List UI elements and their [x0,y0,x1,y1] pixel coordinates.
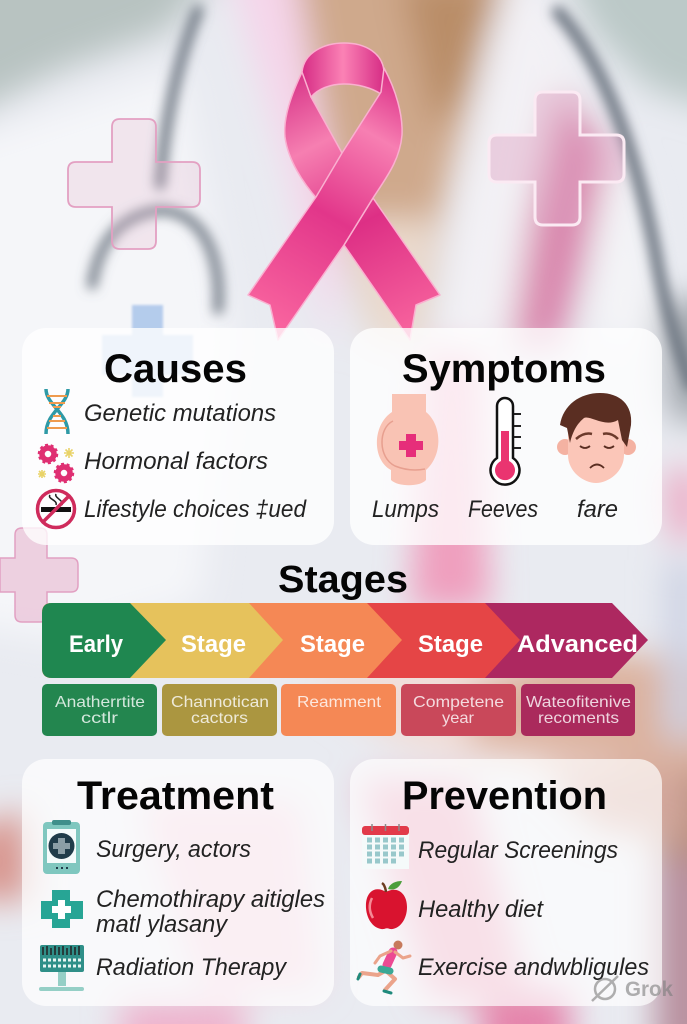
watermark: Grok: Grok [625,978,673,1001]
box: early: Anatherrtite [55,694,145,711]
heading: symptoms: Symptoms [402,347,606,391]
list text: treatment: Surgery, actors [96,836,251,863]
heading: treatment: Treatment [77,774,274,818]
panel: causes [22,328,334,545]
list text: prevention [418,837,649,981]
list text: treatment: matl ylasany [96,911,229,938]
labels: symptoms: fare [577,496,618,523]
box: early: cctlr [81,710,119,727]
box: advanced [521,684,635,736]
icon: thermometer [490,398,521,485]
list text: prevention: Regular Screenings [418,837,618,864]
box: stage two: Channotican [171,694,269,711]
box: stage two [162,684,277,736]
list text: causes: Hormonal factors [84,448,268,475]
icon: lump [377,394,438,485]
labels: symptoms: Lumps [372,496,439,523]
box: advanced: Wateofitenive [526,694,631,711]
decorative cross: blue [102,305,193,397]
stage labels: Stage [181,631,246,658]
list text: causes [84,400,307,523]
icon: runner [358,940,410,993]
panel: treatment [22,759,334,1006]
box: stage three: Reamment [297,694,382,711]
list text: causes: Genetic mutations [84,400,276,427]
list text: prevention: Healthy diet [418,896,544,923]
box: early [42,684,157,736]
icon: radiation machine [39,945,84,991]
box: stage four: year [442,710,475,727]
decorative cross: left [68,119,200,249]
icon: chemo cross [41,890,83,928]
list text: treatment: Radiation Therapy [96,954,288,981]
icon: dna [46,389,68,434]
stage labels: Advanced [517,631,638,658]
stage labels: Early [69,631,124,658]
pink ribbon [248,43,440,340]
stages chevron bar [42,603,648,678]
list text: causes: Lifestyle choices ‡ued [84,496,307,523]
list text: treatment: Chemothirapy aitigles [96,886,325,913]
heading: prevention: Prevention [402,774,607,818]
panel: prevention [350,759,662,1006]
heading: stages: Stages [278,559,408,601]
box: stage four [401,684,516,736]
decorative cross: right [489,92,624,225]
icon: calendar [362,824,409,869]
box: stage four: Competene [413,694,504,711]
icon: medical tablet [43,820,80,874]
stage labels [69,631,638,658]
list text: treatment [96,836,325,981]
icon: no smoking [38,490,74,528]
stage labels: Stage [418,631,483,658]
box: stage two: cactors [191,710,248,727]
labels: symptoms [372,496,618,523]
list text: prevention: Exercise andwbligules [418,954,649,981]
stage detail boxes [42,684,635,736]
box: advanced: recoments [538,710,619,727]
stage labels: Stage [300,631,365,658]
icon: apple [366,881,407,929]
panel: symptoms [350,328,662,545]
labels: symptoms: Feeves [468,496,538,523]
decorative cross: lower left [0,528,78,622]
icon: tired face [557,393,636,483]
watermark: Grok [592,976,673,1001]
box: stage three [281,684,396,736]
heading: causes: Causes [104,347,247,391]
icon: hormone gears [38,445,74,482]
